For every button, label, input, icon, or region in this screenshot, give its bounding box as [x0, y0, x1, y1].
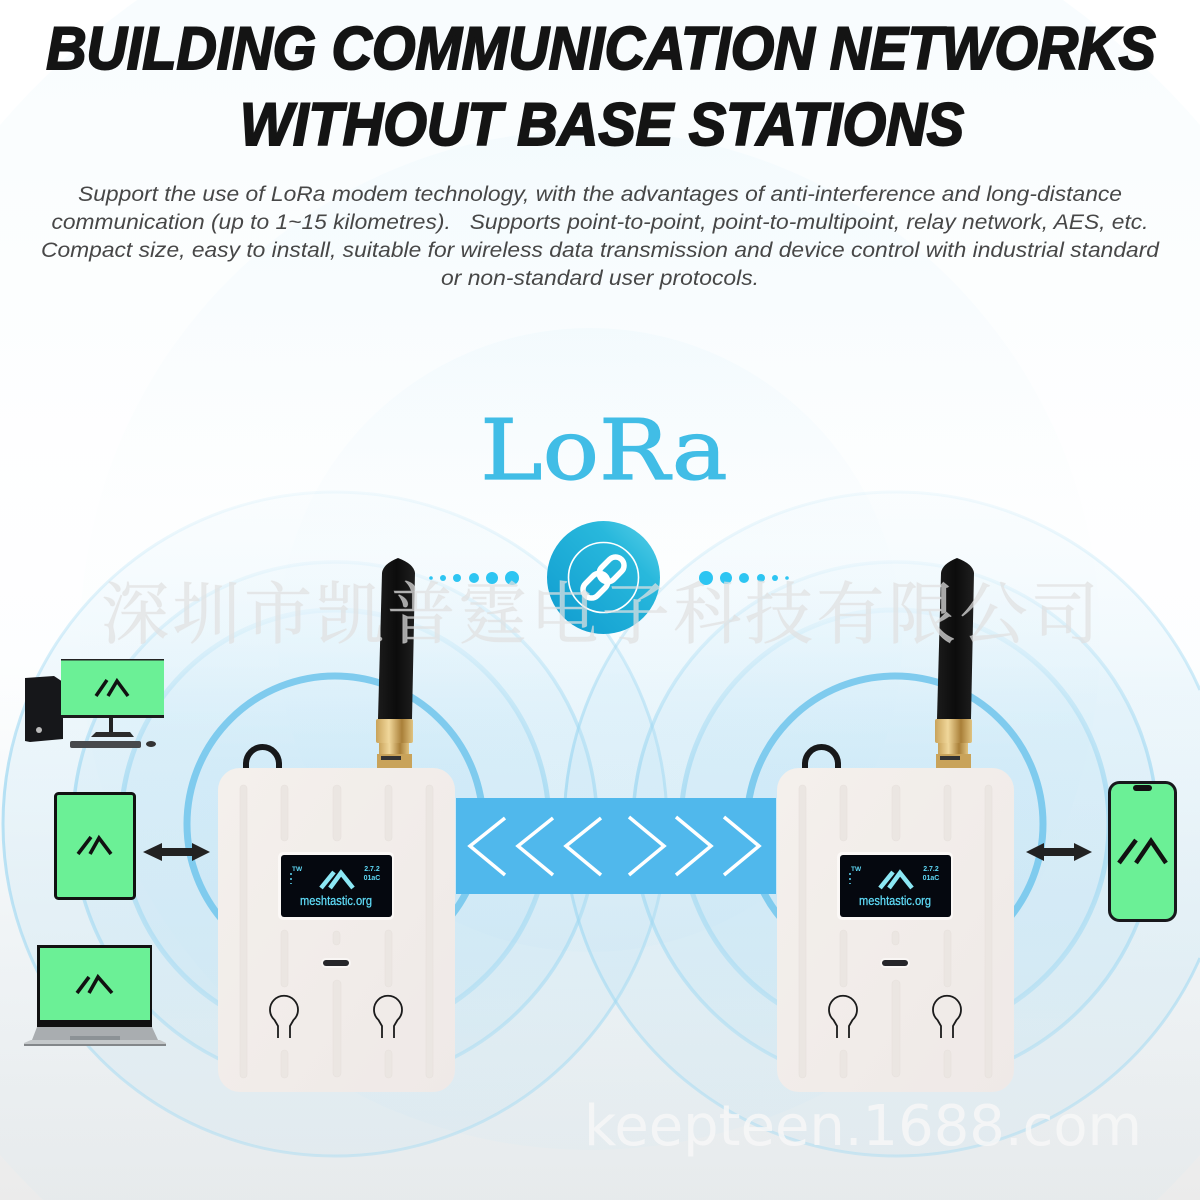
OLED screen: 01aC	[923, 875, 939, 882]
enclosure	[218, 768, 455, 1092]
OLED screen	[278, 852, 394, 920]
description text	[41, 182, 1160, 290]
icon: link badge	[547, 521, 660, 634]
hanging loop	[246, 747, 279, 769]
OLED screen: 2.7.2	[364, 866, 380, 873]
OLED screen	[837, 852, 953, 920]
dots: left of badge	[429, 571, 519, 585]
description text: or non-standard user protocols.	[441, 266, 759, 290]
antenna	[935, 558, 974, 769]
icon: desktop computer	[25, 659, 164, 748]
OLED screen: 01aC	[364, 875, 380, 882]
arrow: right double-headed	[1026, 843, 1092, 861]
icon: laptop	[24, 945, 166, 1046]
dots: right of badge	[699, 571, 789, 585]
left device	[218, 558, 455, 1092]
hanging loop	[805, 747, 838, 769]
USB port	[321, 958, 351, 968]
icon: smartphone	[1110, 782, 1176, 920]
watermark: website: keepteen.1688.com	[584, 1094, 1142, 1159]
description text: Compact size, easy to install, suitable for wireless data transmission and device control with industrial standard	[41, 238, 1160, 262]
USB port	[880, 958, 910, 968]
title: WITHOUT BASE STATIONS	[240, 91, 964, 158]
arrow: left double-headed	[143, 843, 210, 861]
title	[46, 16, 1156, 158]
OLED screen: meshtastic.org	[300, 894, 372, 908]
LoRa heading: LoRa	[480, 402, 728, 499]
keyhole left	[270, 996, 298, 1038]
watermark: company name: 深圳市凯普霆电子科技有限公司	[101, 561, 1099, 658]
description text: communication (up to 1~15 kilometres). Supports point-to-point, point-to-multipoint, relay network, AES, etc.	[52, 210, 1148, 234]
data link band	[456, 798, 776, 894]
OLED screen: TW	[292, 866, 303, 873]
keyhole left	[829, 996, 857, 1038]
signal rings: right device	[564, 492, 1200, 1156]
icon: tablet	[56, 794, 134, 898]
enclosure	[777, 768, 1014, 1092]
signal rings: left device	[3, 492, 667, 1156]
keyhole right	[374, 996, 402, 1038]
description text: Support the use of LoRa modem technology, with the advantages of anti-interference and long-distance	[78, 182, 1122, 206]
OLED screen: meshtastic.org	[859, 894, 931, 908]
antenna	[376, 558, 415, 769]
title: BUILDING COMMUNICATION NETWORKS	[46, 16, 1156, 82]
OLED screen: TW	[851, 866, 862, 873]
right device	[777, 558, 1014, 1092]
keyhole right	[933, 996, 961, 1038]
OLED screen: 2.7.2	[923, 866, 939, 873]
